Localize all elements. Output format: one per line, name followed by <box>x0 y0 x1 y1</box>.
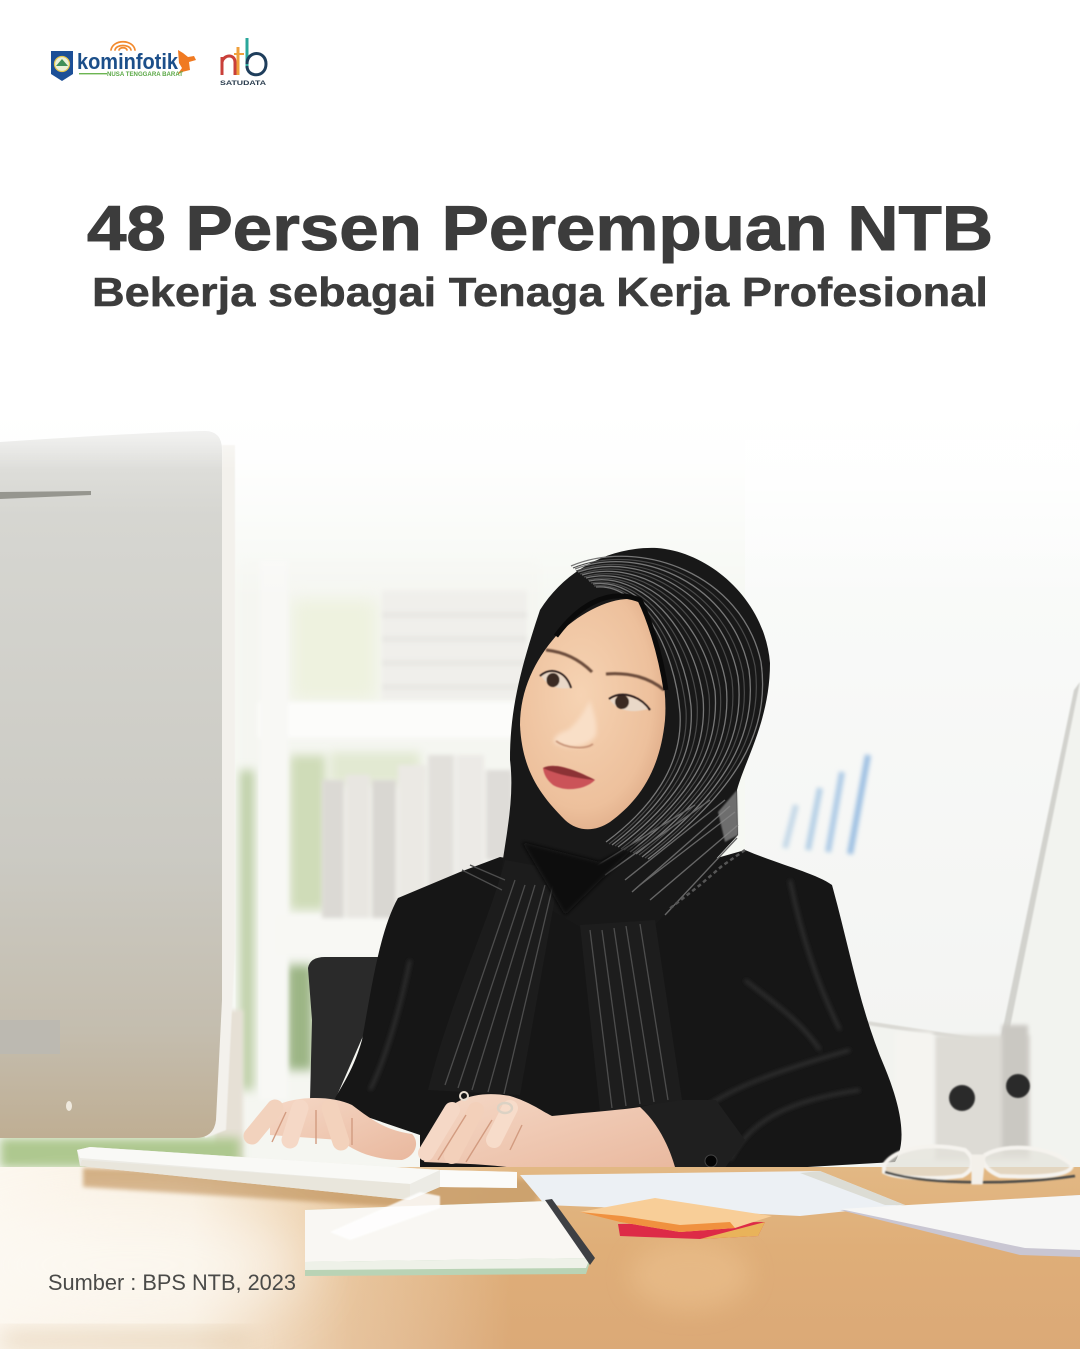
hijab <box>500 548 770 930</box>
wooden desk <box>0 1167 1080 1349</box>
hand: right <box>424 1092 675 1173</box>
books on shelf <box>322 755 512 918</box>
scarf knot and drape left <box>428 860 560 1095</box>
office chair <box>308 957 378 1100</box>
icon: deer <box>177 50 196 75</box>
keyboard <box>77 1147 517 1200</box>
logo: NTB Satudata: SATUDATA <box>220 80 266 87</box>
document sheets <box>520 1171 905 1216</box>
icon: provincial shield <box>51 51 73 81</box>
logo: kominfotik <box>51 42 196 81</box>
face <box>520 599 665 829</box>
torso and arms <box>332 850 902 1172</box>
hijab inner edge <box>556 596 666 690</box>
neck shadow <box>522 842 640 915</box>
source note: Sumber : BPS NTB, 2023 <box>48 1270 296 1295</box>
chart on whiteboard <box>785 755 868 854</box>
blurred shelf stripes <box>382 590 527 700</box>
hijab pleats <box>571 556 763 859</box>
scarf drape right <box>580 920 682 1112</box>
scarf ruffle at shoulder <box>668 850 745 910</box>
title line two: Bekerja sebagai Tenaga Kerja Profesional <box>92 269 988 315</box>
wordmark: kominfotik <box>77 49 178 74</box>
sleeve highlights <box>370 880 860 1160</box>
computer monitor <box>0 431 235 1138</box>
title line one: 48 Persen Perempuan NTB <box>87 194 993 264</box>
tagline: NUSA TENGGARA BARAT <box>107 72 183 78</box>
whiteboard <box>745 420 1080 1170</box>
title <box>87 194 993 315</box>
eyes <box>540 671 650 711</box>
white glow on monitor top <box>0 420 240 470</box>
eyebrows <box>546 650 592 672</box>
photo: office background <box>0 420 1080 1180</box>
hand: left <box>252 1098 416 1160</box>
lower scarf pleats <box>590 800 738 915</box>
icon: signal waves <box>111 42 135 50</box>
white fade at top of photo <box>0 400 1080 600</box>
shirt cuff <box>640 1100 745 1172</box>
paper stack right <box>840 1195 1080 1257</box>
nose <box>554 700 596 747</box>
whiteboard stand <box>895 1025 1030 1160</box>
silver scarf highlight <box>718 790 738 842</box>
notebook <box>305 1192 595 1276</box>
woman <box>252 548 902 1173</box>
logo: NTB Satudata <box>220 38 266 87</box>
lips <box>543 766 595 789</box>
eyeglasses <box>884 1146 1075 1184</box>
sticky notes <box>580 1198 772 1239</box>
